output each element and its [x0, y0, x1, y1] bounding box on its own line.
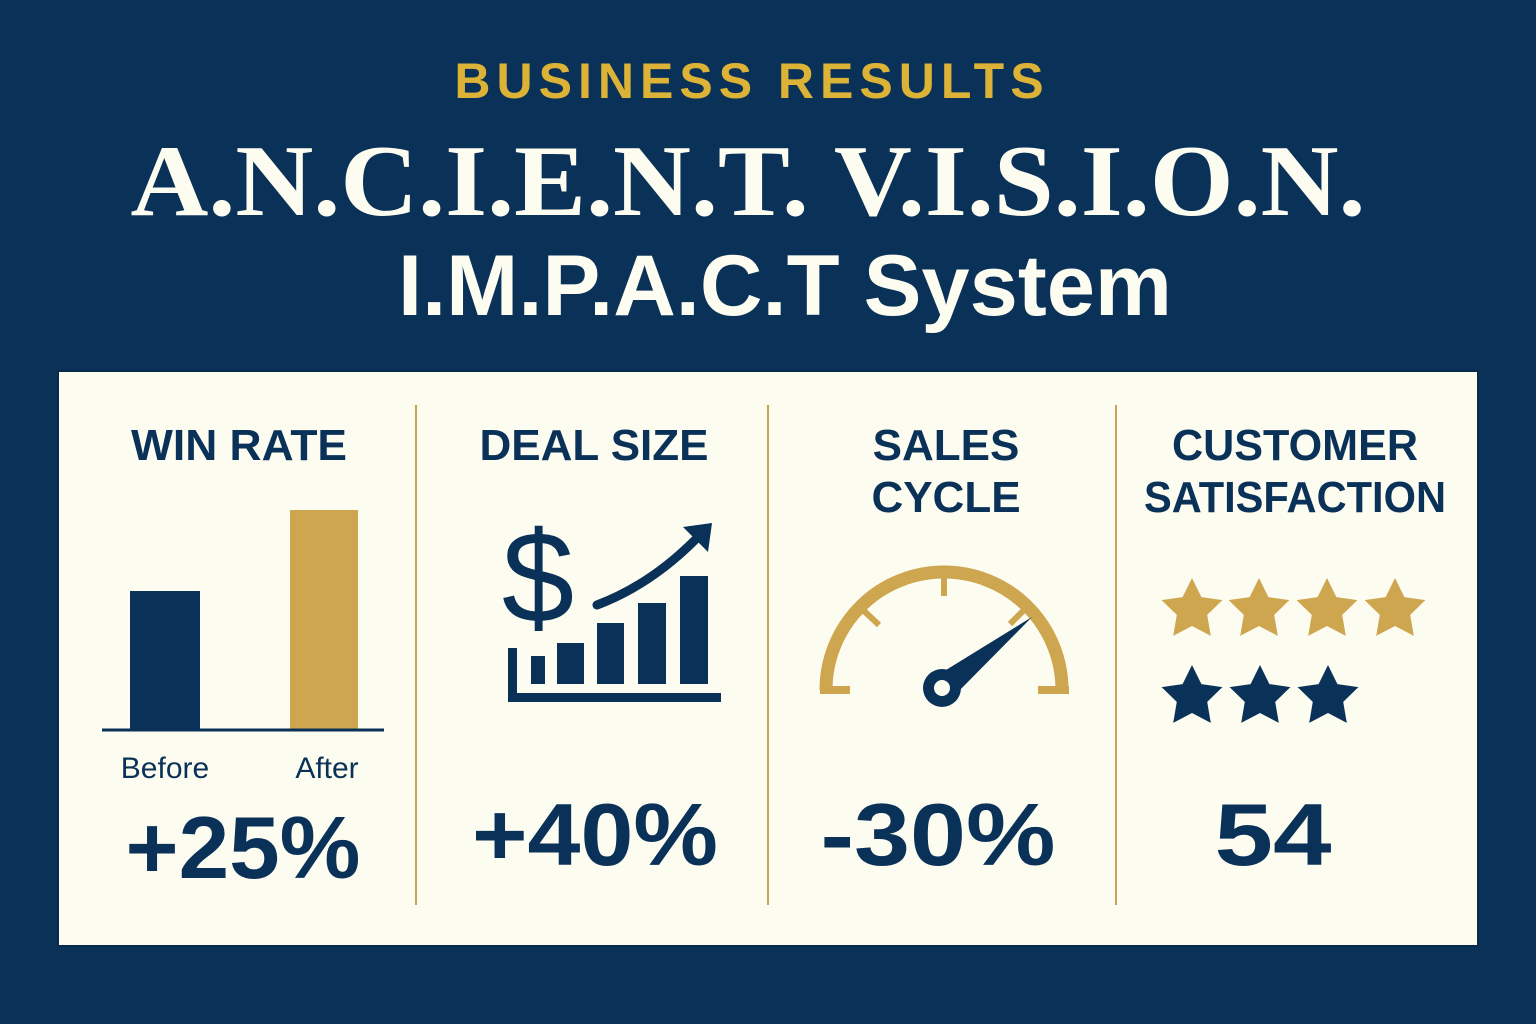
icon: dollar growth chart: $ [502, 504, 574, 650]
panel: customer satisfaction [1144, 421, 1446, 884]
icon: speedometer [820, 572, 1069, 707]
value: 54: 54 [1214, 785, 1332, 884]
heading: win rate: WIN RATE [131, 421, 347, 470]
main title: A.N.C.I.E.N.T. V.I.S.I.O.N. [130, 125, 1366, 238]
icon: stars [1162, 578, 1425, 723]
bar chart: before/after [102, 510, 384, 785]
icon: dollar growth chart [502, 504, 721, 702]
kicker title: BUSINESS RESULTS [454, 53, 1050, 109]
heading: sales cycle: SALES [873, 421, 1019, 470]
value: -30%: -30% [820, 785, 1056, 884]
bar chart: before/after: Before [121, 752, 209, 785]
panel: sales cycle: CYCLE [871, 473, 1021, 522]
panel: win rate [102, 421, 384, 897]
panel: sales cycle [820, 421, 1069, 884]
heading: deal size: DEAL SIZE [479, 421, 709, 470]
bar chart: before/after: After [295, 752, 359, 785]
value: +25%: +25% [126, 798, 360, 897]
subtitle: I.M.P.A.C.T System [398, 238, 1172, 334]
value: +40%: +40% [472, 785, 718, 884]
panel: customer satisfaction: SATISFACTION [1144, 473, 1446, 522]
panel: metrics [58, 371, 1478, 946]
panel: deal size [472, 421, 721, 884]
heading: customer satisfaction: CUSTOMER [1172, 421, 1418, 470]
